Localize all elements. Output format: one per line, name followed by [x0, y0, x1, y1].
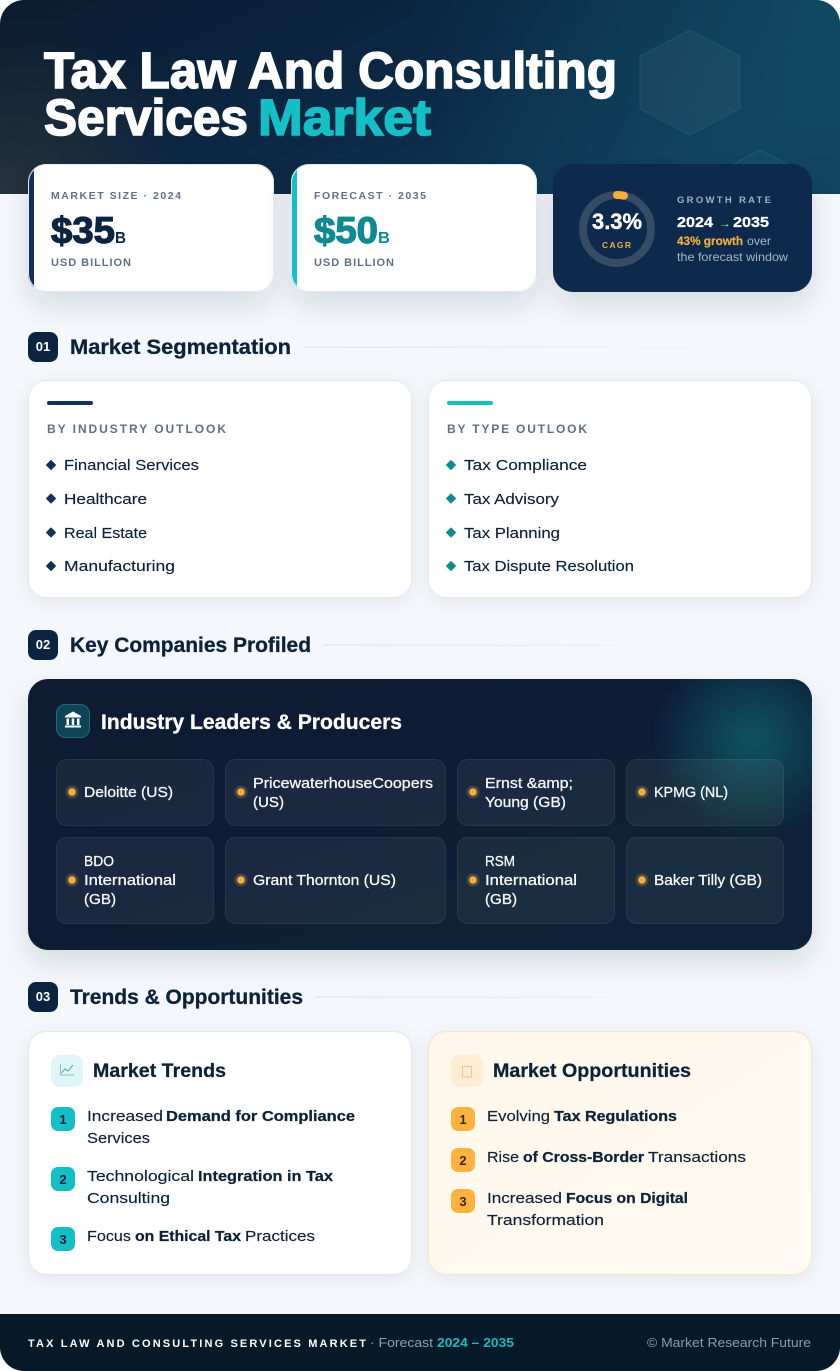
decorative hexagon large	[640, 30, 740, 135]
opportunity 1: Evolving	[487, 1108, 550, 1125]
footer: · Forecast	[370, 1336, 434, 1350]
opportunity 3: 3	[459, 1194, 467, 1209]
stat card: growth rate	[553, 164, 812, 292]
trend 2: Integration in Tax	[198, 1168, 334, 1185]
opportunity 2	[451, 1148, 746, 1172]
footer: TAX LAW AND CONSULTING SERVICES MARKET	[28, 1338, 366, 1350]
panel: by type outlook: Tax Dispute Resolution	[464, 558, 634, 575]
company: Ernst & Young	[458, 760, 614, 826]
company: PricewaterhouseCoopers: PricewaterhouseCoopers	[253, 776, 433, 792]
section heading: key companies: 02	[36, 637, 50, 652]
opportunity 3: Increased	[487, 1190, 562, 1207]
company: Grant Thornton: Grant Thornton (US)	[253, 873, 396, 889]
company: Deloitte: Deloitte (US)	[84, 785, 173, 801]
stat card: market size 2024: $35	[51, 210, 115, 251]
panel: by industry outlook: Manufacturing	[64, 558, 175, 575]
stat card: forecast 2035: $50	[314, 210, 378, 251]
trend 2	[51, 1167, 334, 1207]
opportunity 3: Transformation	[487, 1212, 604, 1229]
panel: market opportunities	[428, 1032, 812, 1274]
opportunity 3	[451, 1189, 688, 1229]
stat card: market size 2024: MARKET SIZE · 2024	[51, 190, 181, 202]
company: RSM International: (GB)	[485, 892, 517, 908]
panel: by industry outlook	[28, 380, 412, 598]
panel: by industry outlook: Healthcare	[64, 491, 147, 508]
company: Ernst & Young: Ernst &amp;	[485, 776, 573, 792]
company: RSM International	[458, 838, 614, 924]
panel: by industry outlook: Financial Services	[64, 457, 199, 474]
company: Ernst & Young: Young (GB)	[485, 795, 566, 811]
section heading: trends and opportunities: 03	[36, 989, 50, 1004]
title	[44, 42, 617, 146]
section heading: market segmentation: Market Segmentation	[70, 336, 291, 359]
company: BDO International	[56, 838, 214, 924]
company: PricewaterhouseCoopers: (US)	[253, 795, 284, 811]
panel: by type outlook: Tax Compliance	[464, 457, 587, 474]
company: BDO International: BDO	[84, 854, 114, 870]
icon: placeholder glyph	[451, 1055, 483, 1087]
trend 3: Practices	[245, 1228, 315, 1245]
trend 1: 1	[59, 1112, 67, 1127]
panel: industry leaders	[28, 679, 812, 950]
panel: by type outlook: Tax Advisory	[464, 491, 560, 508]
stat card: market size 2024: USD BILLION	[51, 257, 131, 269]
trend 1	[51, 1107, 355, 1147]
company: RSM International: RSM	[485, 854, 515, 870]
company: Baker Tilly: Baker Tilly (GB)	[654, 873, 762, 889]
trend 3: Focus	[87, 1228, 131, 1245]
title: Market	[258, 89, 431, 146]
stat card: forecast 2035: FORECAST · 2035	[314, 190, 426, 202]
CAGR ring: CAGR	[602, 240, 631, 250]
company: PricewaterhouseCoopers	[226, 760, 446, 826]
opportunity 1	[451, 1107, 677, 1131]
decorative hexagon small	[733, 150, 787, 164]
footer	[0, 1314, 840, 1371]
growth text: over	[747, 234, 771, 248]
company: KPMG	[626, 760, 784, 826]
panel: market opportunities: Market Opportunities	[493, 1061, 691, 1082]
trend 2: 2	[59, 1172, 67, 1187]
company: Baker Tilly	[626, 838, 784, 924]
panel: market trends: Market Trends	[93, 1061, 226, 1082]
title: Services	[44, 89, 248, 146]
trend 3: on Ethical Tax	[135, 1228, 242, 1245]
section heading: key companies: Key Companies Profiled	[70, 634, 311, 657]
company: BDO International: (GB)	[84, 892, 116, 908]
header banner	[0, 0, 840, 214]
section heading: trends and opportunities: Trends & Opportunities	[70, 986, 303, 1009]
company: RSM International: International	[485, 873, 577, 889]
CAGR ring: 3.3%	[592, 209, 642, 234]
panel: by type outlook: Tax Planning	[464, 525, 560, 542]
section heading: market segmentation: 01	[36, 339, 50, 354]
panel: by type outlook	[428, 380, 812, 598]
stat card: market size 2024: B	[115, 230, 126, 247]
stat card: forecast 2035	[291, 164, 537, 292]
trend 1: Demand for Compliance	[166, 1108, 355, 1125]
company: KPMG: KPMG (NL)	[654, 785, 728, 801]
panel: by industry outlook: BY INDUSTRY OUTLOOK	[47, 422, 226, 436]
trend 3: 3	[59, 1232, 67, 1247]
panel: by industry outlook: Real Estate	[64, 525, 147, 542]
company: Grant Thornton	[226, 838, 446, 924]
growth text: 43% growth	[677, 234, 743, 248]
panel: industry leaders: Industry Leaders & Producers	[101, 711, 402, 734]
section heading: trends and opportunities	[28, 982, 715, 1012]
opportunity 1: 1	[459, 1112, 467, 1127]
footer: 2024 – 2035	[437, 1336, 514, 1350]
growth text: GROWTH RATE	[677, 195, 771, 206]
opportunity 1: Tax Regulations	[554, 1108, 677, 1125]
growth text: →	[719, 218, 731, 230]
growth text	[677, 195, 788, 264]
opportunity 2: of Cross-Border	[523, 1149, 644, 1166]
trend 3	[51, 1227, 315, 1251]
growth text: 2024	[677, 214, 714, 231]
opportunity 2: 2	[459, 1153, 467, 1168]
trend 1: Increased	[87, 1108, 163, 1125]
panel: market trends	[28, 1032, 412, 1274]
stat card: forecast 2035: B	[378, 230, 390, 247]
CAGR ring	[583, 195, 651, 263]
opportunity 2: Rise	[487, 1149, 519, 1166]
title: Tax Law And Consulting	[44, 42, 617, 99]
section heading: key companies	[28, 630, 723, 660]
stat card: market size 2024	[28, 164, 274, 292]
footer: © Market Research Future	[647, 1336, 811, 1350]
company: Deloitte	[56, 760, 214, 826]
trend 2: Consulting	[87, 1190, 170, 1207]
growth text: the forecast window	[677, 250, 788, 264]
company: BDO International: International	[84, 873, 176, 889]
trend 2: Technological	[87, 1168, 194, 1185]
opportunity 3: Focus on Digital	[566, 1190, 688, 1207]
trend 1: Services	[87, 1130, 150, 1147]
icon: line chart	[51, 1055, 83, 1087]
panel: by type outlook: BY TYPE OUTLOOK	[447, 422, 587, 436]
growth text: 2035	[733, 214, 769, 231]
opportunity 2: Transactions	[648, 1149, 746, 1166]
section heading: market segmentation	[28, 332, 723, 362]
icon: institution	[56, 704, 90, 738]
stat card: forecast 2035: USD BILLION	[314, 257, 394, 269]
